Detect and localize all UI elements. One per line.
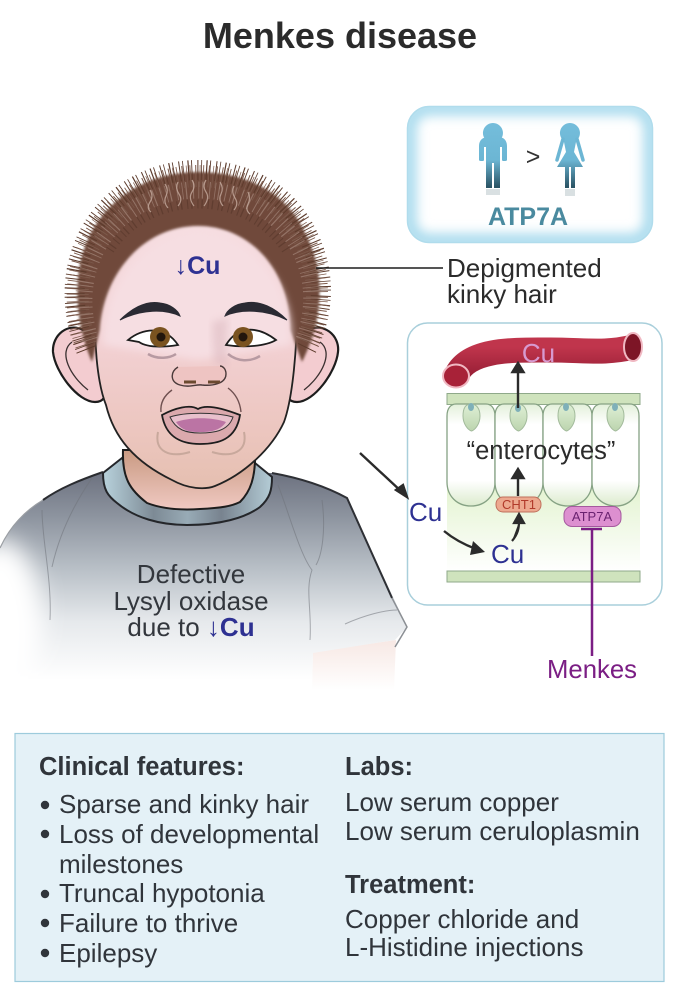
- nuclear spots: [468, 403, 618, 412]
- enterocytes label: “enterocytes”: [467, 437, 615, 465]
- inhibition line: Menkes to ATP7A: [581, 529, 602, 656]
- clinical features: Failure to thrive: [59, 908, 238, 938]
- nuclei: [463, 404, 624, 431]
- face: [95, 205, 297, 488]
- shirt outline and seams: [0, 472, 407, 647]
- copper left: Cu: [409, 497, 442, 527]
- labs: [345, 753, 640, 846]
- nose shadow: [212, 318, 228, 368]
- icon: female figure: [557, 123, 583, 188]
- blood vessel: [443, 333, 642, 388]
- CHT1 transporter: CHT1: [502, 497, 536, 512]
- arrow to lower copper: [444, 531, 485, 555]
- panel: clinical summary: [15, 734, 664, 982]
- callout text: depigmented kinky hair: Depigmented: [447, 253, 602, 283]
- left eye: [128, 327, 178, 347]
- nose: [172, 366, 226, 386]
- mouth: [162, 407, 240, 444]
- arrow to CHT1: [512, 514, 524, 541]
- labs: Labs:: [345, 753, 413, 781]
- shirt text: due to ↓Cu: [127, 612, 255, 642]
- arrow through cell: [512, 469, 524, 496]
- female reflection: [565, 189, 575, 196]
- gene label: ATP7A: [488, 203, 568, 231]
- enterocyte cells: [447, 404, 639, 506]
- hair: [75, 170, 321, 362]
- label: low copper on forehead: ↓Cu: [175, 252, 220, 280]
- arrow: copper intake: [360, 453, 407, 497]
- left eyebrow: [120, 302, 180, 320]
- ATP7A transporter: [564, 506, 621, 526]
- clinical features: Sparse and kinky hair: [59, 789, 309, 819]
- treatment: [345, 871, 583, 962]
- right eye: [226, 327, 276, 347]
- right ear: [286, 328, 338, 402]
- treatment: L-Histidine injections: [345, 932, 583, 962]
- shirt text: Lysyl oxidase: [113, 586, 269, 616]
- shirt text: Defective: [137, 559, 245, 589]
- top membrane band: [447, 394, 640, 404]
- wavy light streaks: [148, 180, 250, 214]
- shirt text: [113, 559, 269, 642]
- callout text: depigmented kinky hair: kinky hair: [447, 279, 557, 309]
- upper lip folds: [161, 388, 241, 412]
- neck: [123, 450, 255, 509]
- shirt collar: [103, 458, 272, 525]
- clinical features: Clinical features:: [39, 753, 244, 781]
- bottom membrane band: [447, 571, 640, 582]
- clinical features: Loss of developmental: [59, 819, 319, 849]
- arrow to vessel: [512, 363, 524, 408]
- Menkes label: Menkes: [547, 656, 637, 684]
- treatment: Treatment:: [345, 871, 475, 899]
- left sleeve fade: [0, 540, 42, 700]
- ATP7A transporter: ATP7A: [572, 509, 612, 524]
- left ear: [53, 328, 106, 402]
- copper in vessel: Cu: [522, 338, 555, 368]
- panel: sex ratio and gene: [407, 106, 653, 243]
- icon: male figure: [479, 123, 507, 188]
- forehead: [103, 232, 291, 360]
- callout line: hair: [316, 267, 443, 269]
- right eyebrow: [225, 302, 287, 320]
- labs: Low serum ceruloplasmin: [345, 816, 640, 846]
- right arm: [312, 640, 396, 690]
- clinical features: milestones: [59, 849, 183, 879]
- clinical features: Epilepsy: [59, 938, 157, 968]
- male reflection: [486, 189, 500, 195]
- labs: Low serum copper: [345, 787, 559, 817]
- clinical features: [39, 753, 319, 968]
- submucosa background: [447, 485, 640, 572]
- clinical features: Truncal hypotonia: [59, 878, 265, 908]
- title: Menkes disease: [203, 15, 477, 56]
- shirt: [0, 472, 407, 690]
- treatment: Copper chloride and: [345, 904, 579, 934]
- copper lower: Cu: [491, 539, 524, 569]
- illustration: child with Menkes disease: [0, 170, 407, 700]
- greater-than sign: >: [526, 143, 540, 171]
- panel: enterocyte pathway: [408, 323, 662, 605]
